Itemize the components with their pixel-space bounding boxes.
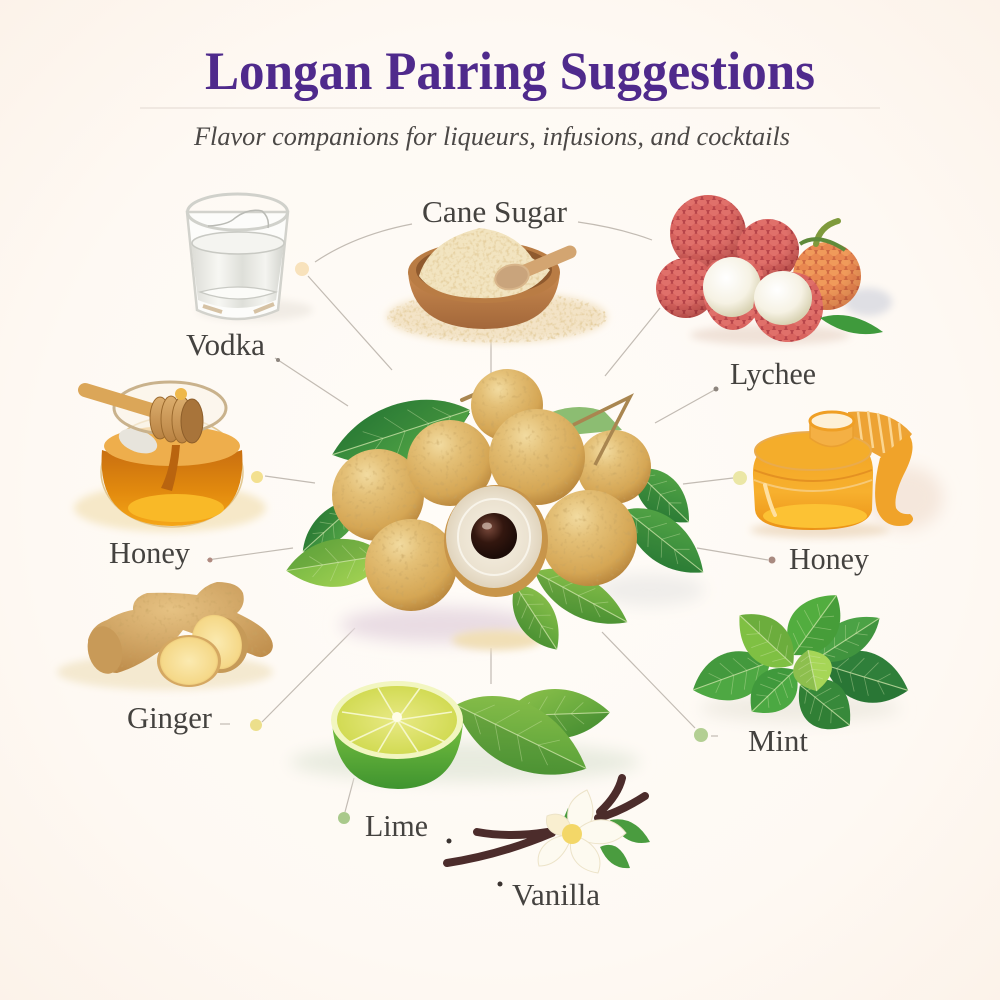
connector dots	[208, 262, 776, 886]
label: Lime: Lime	[365, 808, 428, 843]
icon: ginger	[57, 582, 273, 690]
title: Longan Pairing Suggestions	[205, 41, 815, 101]
icon: honey jar with dipper	[74, 382, 266, 532]
fruits	[332, 369, 651, 611]
icon: cane sugar bowl	[387, 228, 607, 343]
label: Lychee: Lychee	[730, 356, 816, 391]
icon: longan cluster	[283, 369, 717, 660]
icon: vanilla	[447, 778, 650, 873]
stems	[462, 393, 478, 400]
label: Vanilla: Vanilla	[512, 877, 600, 912]
icon: lychees	[656, 195, 892, 345]
label: Honey left: Honey	[109, 535, 190, 570]
icon: honey jar right	[750, 411, 943, 538]
subtitle: Flavor companions for liqueurs, infusions, and cocktails	[193, 122, 790, 151]
icon: mint	[685, 581, 916, 743]
icon: lime and leaves	[290, 676, 640, 797]
icon: vodka glass	[187, 194, 313, 321]
label: Cane Sugar: Cane Sugar	[422, 194, 568, 229]
label: Vodka: Vodka	[186, 327, 265, 362]
label: Ginger: Ginger	[127, 700, 213, 735]
leaves behind	[283, 383, 717, 660]
label: Honey right: Honey	[789, 541, 869, 576]
label: Mint: Mint	[748, 723, 808, 758]
connector lines	[207, 222, 768, 812]
cut longan	[444, 485, 548, 597]
